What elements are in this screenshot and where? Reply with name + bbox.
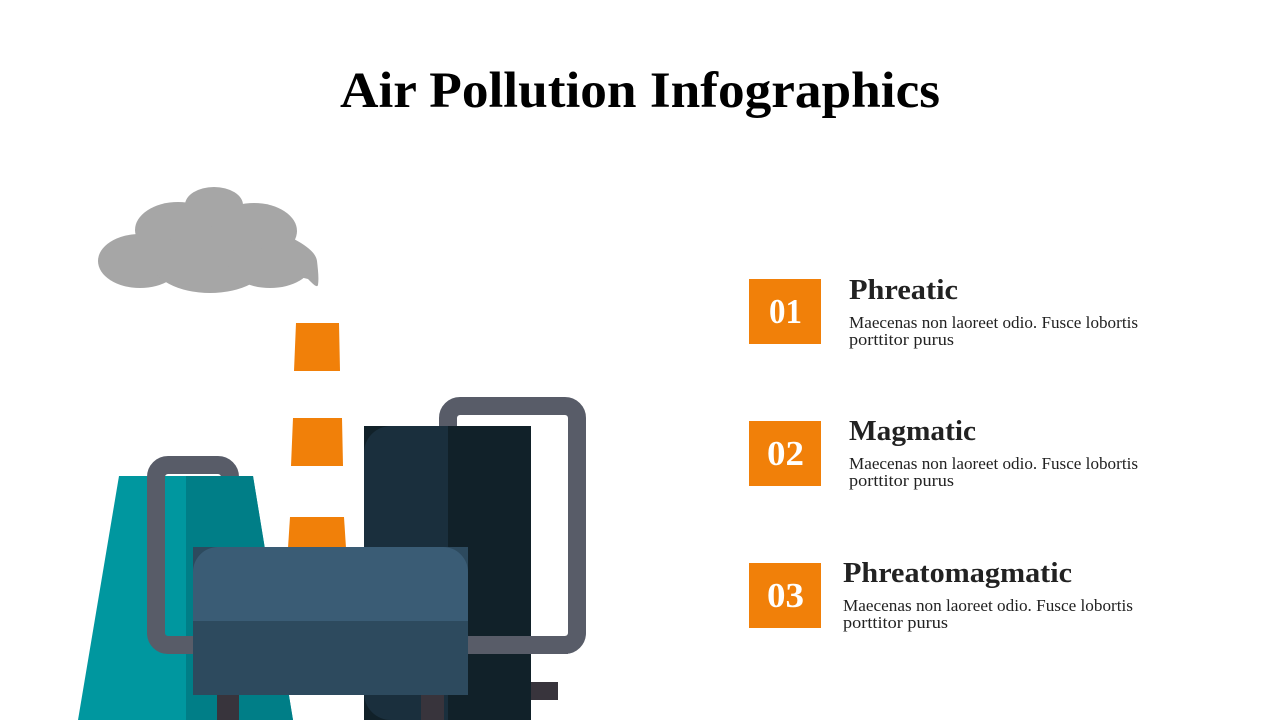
smoke block: top [294,323,340,371]
smoke block: middle [291,418,343,466]
small pipe behind tower [156,465,230,645]
number badge 02: 02 [767,434,804,473]
description 03: Maecenas non laoreet odio. Fusce lobortis [843,596,1133,615]
item 01 [749,274,1138,349]
number badge 02 [749,421,821,486]
description 01: porttitor purus [849,330,954,349]
side bracket [531,682,558,700]
blue furnace [193,547,468,695]
left leg [217,690,239,720]
teal cooling tower [78,476,293,720]
heading: Phreatomagmatic: Phreatomagmatic [843,557,1072,589]
right leg [421,690,444,720]
icon: smoke cloud [98,187,318,293]
number badge 01 [749,279,821,344]
description 02: porttitor purus [849,471,954,490]
title: Air Pollution Infographics [340,63,940,119]
large pipe [448,406,577,645]
number badge 03: 03 [767,576,804,615]
heading: Magmatic: Magmatic [849,415,976,447]
illustration: factory with smoke [78,187,577,720]
item 03 [749,557,1133,632]
dark building [364,426,531,720]
description 03 [843,596,1133,632]
heading: Phreatic: Phreatic [849,274,958,306]
description 02: Maecenas non laoreet odio. Fusce lobortis [849,454,1138,473]
large pipe front segment [468,624,577,654]
smoke block: bottom [288,517,346,548]
small pipe over tower [156,476,200,645]
description 02 [849,454,1138,490]
item 02 [749,415,1138,490]
number badge 03 [749,563,821,628]
number badge 01: 01 [769,292,802,331]
description 01 [849,313,1138,349]
description 03: porttitor purus [843,613,948,632]
description 01: Maecenas non laoreet odio. Fusce lobortis [849,313,1138,332]
